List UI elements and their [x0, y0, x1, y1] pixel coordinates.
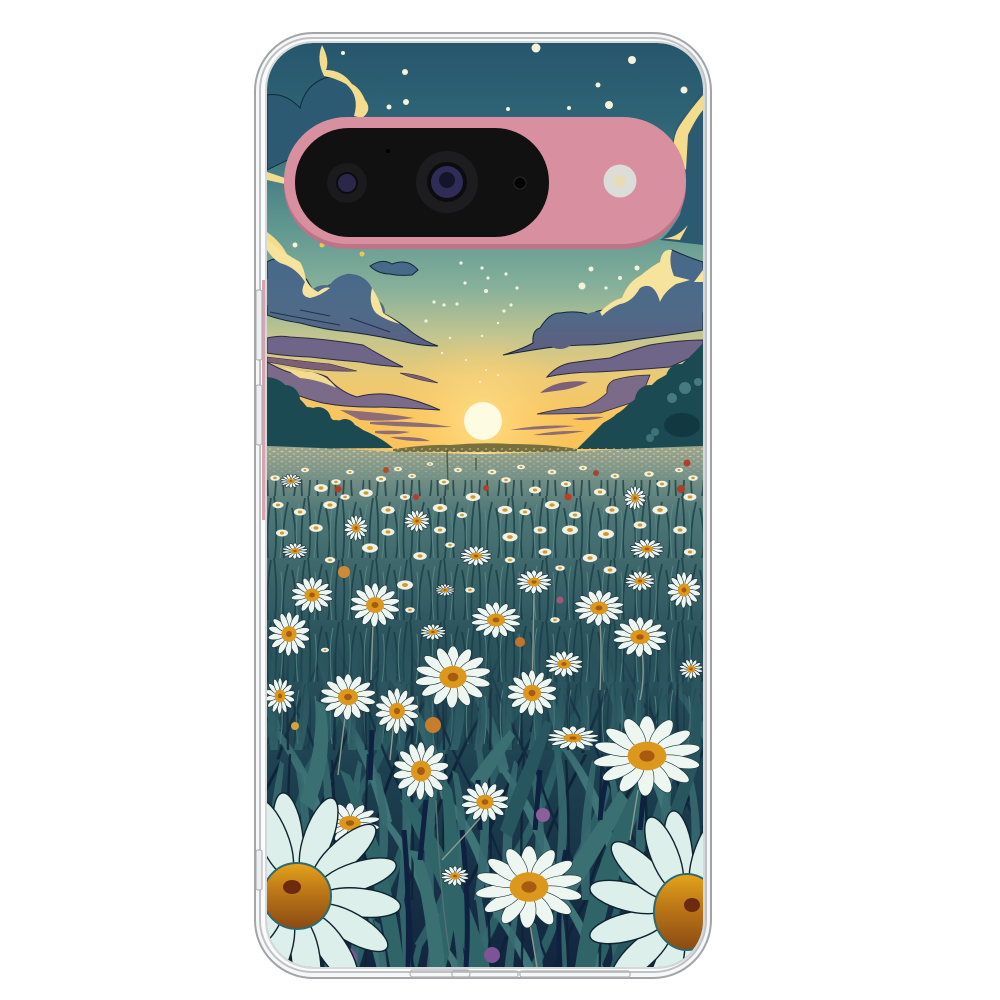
far field tiny flowers: [270, 462, 698, 652]
top left storm clouds: [267, 45, 368, 254]
left large cloud: [263, 240, 438, 346]
pink phone edge on left side: [262, 280, 268, 520]
left thin cloud: [267, 357, 438, 383]
flash: [604, 164, 636, 198]
camera window: [295, 128, 549, 237]
foreground daisies: [265, 646, 702, 928]
meadow ground: [267, 446, 703, 967]
right mid cloud: [547, 340, 703, 377]
mid meadow grass texture: [267, 480, 703, 750]
low wisps near horizon left: [340, 410, 452, 441]
low wisps near horizon right: [510, 417, 604, 435]
small cloud upper centre: [370, 261, 418, 275]
camera bar: [284, 117, 686, 249]
right small cloud: [540, 381, 588, 393]
diagonal grass layers: [267, 640, 703, 970]
large daisy left: [267, 792, 402, 967]
right tree line: [577, 343, 703, 449]
bright distant flower band: [267, 448, 703, 477]
side buttons on case: [256, 290, 262, 890]
bottom port cutouts on case: [410, 970, 630, 977]
dark gaps between blades: [370, 730, 644, 967]
right large cloud: [503, 250, 718, 355]
sensor: [514, 177, 526, 189]
left lower cloud: [267, 362, 440, 410]
red and orange wildflowers: [291, 460, 690, 968]
distant horizon trees: [393, 443, 577, 452]
microphone dot: [386, 149, 390, 153]
artwork panel: daisy meadow at sunset: [267, 43, 703, 967]
large daisy right: [589, 810, 703, 967]
phone case product illustration: [254, 32, 712, 979]
case inner bezel highlight: [266, 42, 704, 968]
small lens: [327, 163, 367, 203]
left mid cloud: [267, 336, 403, 367]
left tree line: [267, 377, 393, 449]
case outer shell: [255, 33, 711, 978]
foreground grass blades: [300, 700, 702, 967]
right lower cloud: [537, 375, 650, 414]
sky background: [267, 43, 703, 453]
main lens: [416, 151, 478, 213]
sun: [464, 402, 502, 440]
sun glow: [420, 348, 545, 454]
flower stems: [338, 450, 643, 967]
scattered sky flowers and stars: [292, 44, 688, 383]
top right clouds: [660, 85, 703, 245]
mid meadow daisies: [268, 474, 703, 679]
